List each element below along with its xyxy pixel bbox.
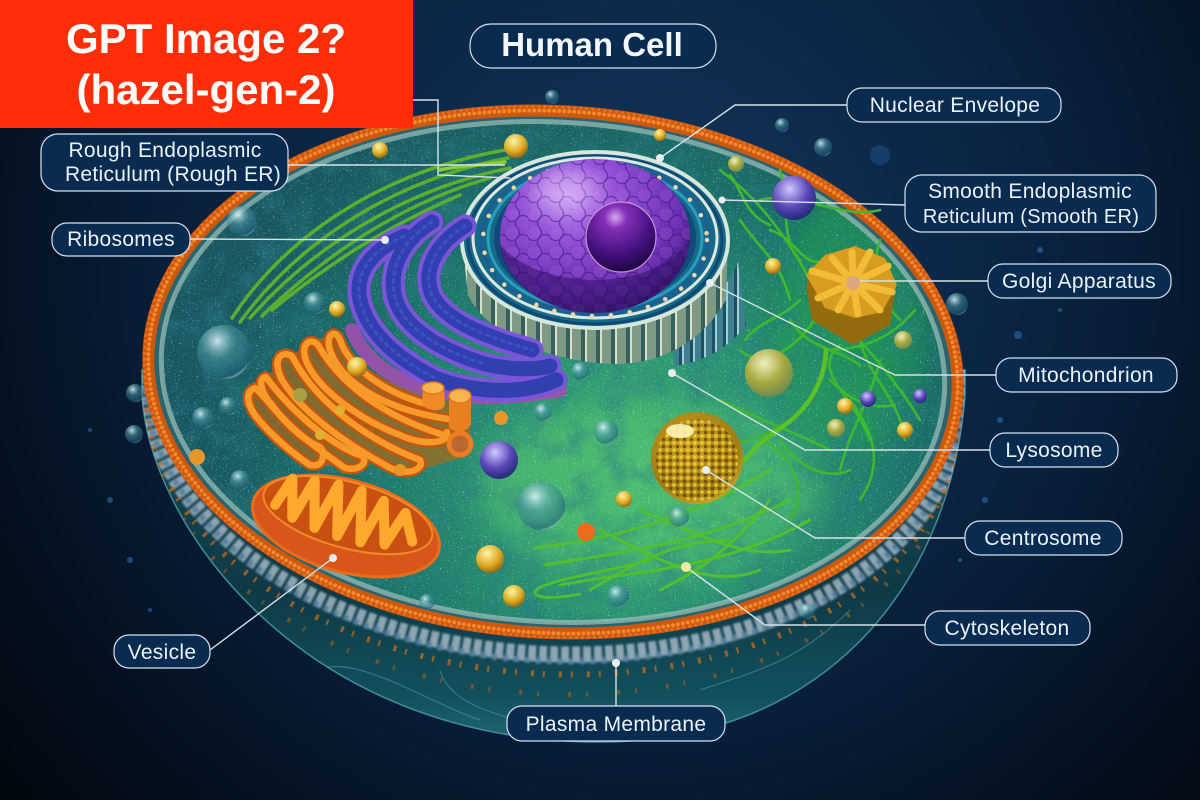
fan top: [806, 246, 897, 318]
label: rough ER: Rough Endoplasmic: [68, 139, 262, 162]
outer blue wall: [672, 262, 746, 366]
plasma membrane lower bowl: [142, 370, 965, 742]
mitochondrion: [241, 457, 451, 595]
golgi tube 1: [422, 388, 445, 410]
cristae: [271, 470, 422, 555]
fibers bottom: [535, 470, 810, 598]
label: centrosome: [965, 521, 1122, 555]
badge text: GPT Image 2?: [66, 15, 346, 62]
rim orange: [135, 90, 971, 654]
inner matrix: [255, 461, 440, 570]
label: cytoskeleton: [925, 611, 1090, 645]
ring beads: [483, 164, 707, 316]
label: ribosomes: [52, 223, 190, 256]
speckle: [162, 122, 944, 622]
nucleus cell texture: [495, 155, 695, 315]
golgi tube 2: [449, 396, 471, 431]
label: nuclear envelope: [847, 88, 1061, 122]
leader lines: [190, 100, 996, 706]
label: golgi apparatus: [988, 264, 1171, 298]
rough ER: [352, 222, 560, 397]
nucleus sphere: [500, 159, 690, 313]
nucleus assembly: [462, 152, 746, 366]
cytoskeleton fibers: [232, 150, 920, 598]
label: nuclear envelope: Nuclear Envelope: [870, 94, 1040, 117]
interior texture: [140, 100, 970, 640]
cell floor: [148, 102, 958, 642]
leader end dots: [329, 154, 726, 667]
golgi tube 1 top: [422, 382, 444, 394]
label: rough ER: [41, 134, 288, 191]
rim glass ring: [148, 102, 958, 642]
petal tops: [812, 252, 892, 314]
nucleus highlight: [535, 172, 595, 208]
hairpins dark: [248, 334, 455, 472]
label: vesicle: Vesicle: [128, 641, 196, 664]
rings: [462, 152, 728, 328]
label: mitochondrion: [996, 358, 1177, 392]
label: smooth ER: Reticulum (Smooth ER): [923, 206, 1139, 228]
fibers top left: [232, 150, 510, 322]
label: smooth ER: Smooth Endoplasmic: [928, 180, 1132, 203]
mottling: [164, 126, 940, 620]
badge: [0, 0, 413, 128]
rim beads outer: [131, 86, 975, 658]
golgi tube 2 top: [449, 389, 471, 403]
golgi yellow organelle: [806, 246, 897, 345]
highlight: [666, 424, 694, 438]
texture: [656, 419, 738, 501]
label: ribosomes: Ribosomes: [67, 228, 175, 251]
lower ER lobe: [352, 330, 560, 397]
label: centrosome: Centrosome: [984, 527, 1102, 550]
fan base: [806, 246, 896, 345]
fiber trunk: [745, 350, 826, 460]
label: golgi apparatus: Golgi Apparatus: [1002, 270, 1156, 293]
label: rough ER: Reticulum (Rough ER): [65, 163, 281, 186]
outer membrane: [241, 457, 451, 595]
golgi hairpin body: [250, 335, 470, 470]
rim beads: [135, 90, 971, 654]
title: Human Cell: [501, 26, 683, 63]
glass gap: [135, 89, 971, 655]
nucleus shade: [500, 240, 690, 313]
badge subtext: (hazel-gen-2): [76, 66, 336, 113]
hairpins light: [248, 334, 455, 472]
title: [470, 24, 716, 68]
golgi ring: [449, 433, 471, 455]
label: lysosome: [990, 433, 1118, 467]
golgi orange stack: [248, 334, 471, 472]
bowl bilayer beads and speckles: [142, 370, 965, 720]
label: cytoskeleton: Cytoskeleton: [944, 617, 1070, 640]
bubbles and vesicles: [125, 90, 968, 619]
nuclear cylinder: [462, 240, 728, 364]
background sparkles: [88, 145, 1092, 612]
nucleolus: [586, 202, 656, 272]
label: vesicle: [114, 635, 210, 668]
label: plasma membrane: Plasma Membrane: [526, 713, 706, 736]
label: smooth ER: [905, 175, 1156, 232]
fibers right: [700, 170, 920, 520]
label: mitochondrion: Mitochondrion: [1018, 364, 1154, 387]
lysosome gold sphere: [651, 412, 743, 504]
label: lysosome: Lysosome: [1005, 439, 1103, 462]
label: plasma membrane: [507, 706, 725, 741]
